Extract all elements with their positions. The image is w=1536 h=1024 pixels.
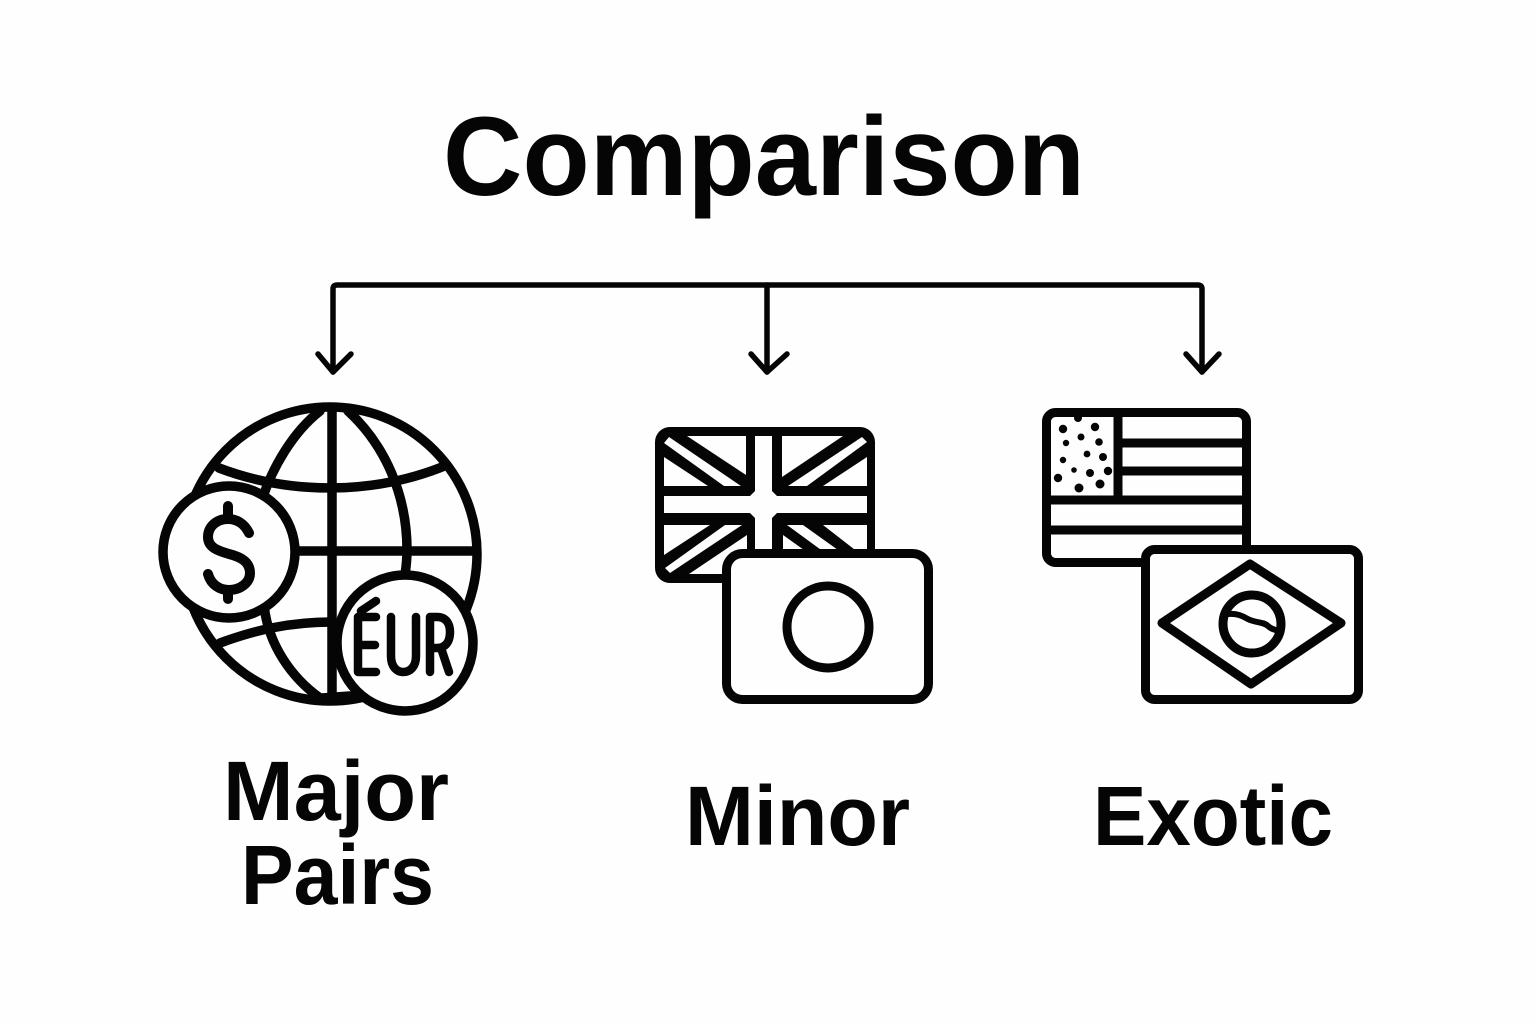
stars: [1054, 414, 1112, 492]
connector arrows: [318, 285, 1219, 372]
icon: USA and Brazil flags: [1046, 412, 1358, 700]
label: Minor: Minor: [685, 769, 910, 863]
label: Major Pairs: Pairs: [241, 828, 434, 922]
label: Exotic: Exotic: [1093, 769, 1333, 863]
label: Major Pairs: Major: [223, 744, 449, 838]
Brazil flag: [1146, 550, 1358, 700]
USA flag: [1046, 412, 1246, 562]
euro coin: [337, 575, 473, 711]
title: Comparison: [443, 94, 1085, 219]
Japan flag: [726, 554, 928, 700]
label: Major Pairs: [223, 744, 449, 922]
UK flag: [655, 427, 875, 583]
icon: globe with dollar and euro coins: [163, 407, 477, 711]
dollar coin: [163, 486, 295, 618]
globe: [183, 407, 477, 701]
icon: UK and Japan flags: [655, 427, 928, 700]
